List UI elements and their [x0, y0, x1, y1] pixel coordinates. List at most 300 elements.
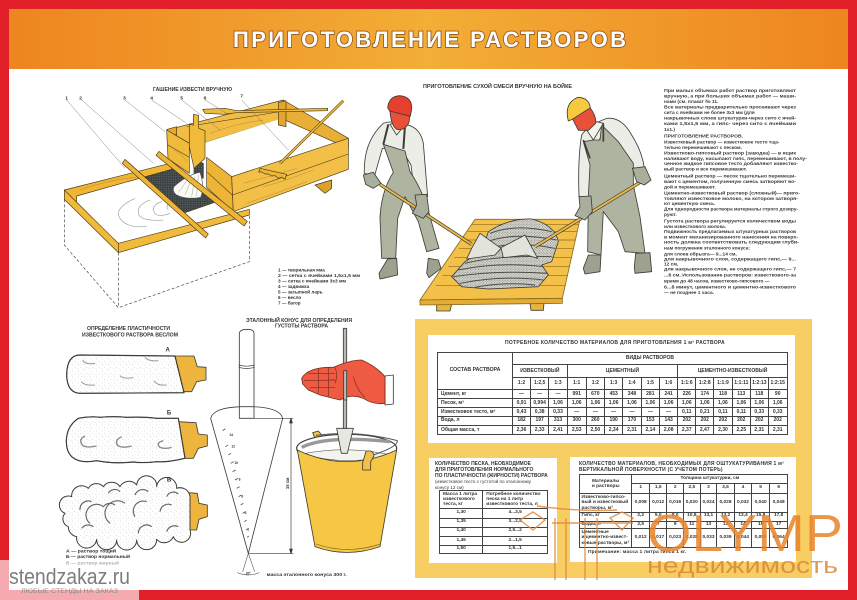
dimension line: [248, 418, 293, 553]
table: materials per 1 m3: 170: [628, 417, 636, 423]
upper box inner floor: [205, 118, 317, 175]
table: materials per 1 m3: Цемент, кг: [441, 391, 466, 397]
table: materials per 1 m3: ВИДЫ РАСТВОРОВ: [626, 355, 674, 361]
pit interior: [77, 169, 247, 239]
heading: sand table: конусу 12 см): [435, 485, 464, 490]
table: materials per 1 m3: 991: [573, 391, 581, 397]
table: materials per 1 m3: Известковое тесто, м³: [441, 409, 495, 415]
table: materials per 1 m3: 2,31: [627, 427, 637, 433]
legend: lime slaking: 4 — задвижка: [278, 284, 310, 289]
table: plaster materials per 1 m2: 6: [777, 485, 780, 490]
collar: [587, 122, 603, 140]
table: sand per lime paste: 2...1,5: [508, 538, 522, 543]
table: materials per 1 m3: 2,31: [773, 427, 783, 433]
body text: вый раствор и все перемешивают.: [664, 166, 747, 172]
logo lines: [520, 506, 633, 580]
table: plaster materials per 1 m2: 13: [706, 522, 711, 527]
mesh: [143, 168, 217, 213]
body text: вают с цементом, полученную смесь затворяют во-: [664, 180, 796, 185]
table: plaster materials per 1 m2: 3: [707, 485, 710, 490]
table: materials per 1 m3: 226: [683, 391, 691, 397]
standard cone: 6: [241, 494, 243, 498]
paddle A: А: [166, 348, 171, 354]
table: materials per 1 m3: —: [648, 409, 653, 415]
table: plaster materials per 1 m2: 13,4: [738, 513, 748, 518]
pit back plank: [64, 163, 172, 202]
table: materials per 1 m3: 313: [554, 417, 562, 423]
table: materials per 1 m3: Общая масса, т: [441, 427, 479, 433]
table: plaster materials per 1 m2: 0,028: [719, 500, 732, 505]
body text: руют.: [664, 213, 677, 218]
table: materials per 1 m3: СОСТАВ РАСТВОРА: [450, 367, 500, 373]
heading: plasticity: ИЗВЕСТКОВОГО РАСТВОРА ВЕСЛОМ: [82, 332, 178, 338]
paddle B: Б: [167, 410, 172, 416]
table: plaster materials per 1 m2: 9: [674, 522, 676, 527]
legend: lime slaking: 5 — засыпной ларь: [278, 288, 323, 294]
legend: paddles: А — раствор тощий: [66, 548, 116, 554]
table: materials per 1 m3: 118: [719, 391, 727, 397]
table: materials per 1 m3: 0,11: [682, 409, 692, 415]
bucket body: [297, 450, 397, 552]
table: materials per 1 m3: 453: [609, 391, 618, 397]
table: materials per 1 m3: 1:1:11: [734, 380, 748, 386]
table: materials per 1 m3: 153: [646, 417, 654, 423]
standard cone: 2: [247, 528, 249, 532]
table: sand per lime paste: Масса 1 литра: [443, 492, 477, 497]
paddle V: В: [167, 477, 172, 483]
table: materials per 1 m3: 1,06: [773, 400, 783, 406]
support block: [315, 180, 332, 193]
table: materials per 1 m3: 348: [628, 391, 636, 397]
heading: sand table: ДЛЯ ПРИГОТОВЛЕНИЯ НОРМАЛЬНОГО: [435, 467, 533, 473]
table: materials per 1 m3: —: [574, 409, 579, 415]
table: plaster materials per 1 m2: 11: [689, 522, 694, 527]
table: materials per 1 m3: 2,30: [718, 427, 728, 433]
table: materials per 1 m3: 143: [664, 417, 673, 423]
body text: ность должна соответствовать следующим глуби-: [664, 238, 799, 246]
body text: сита с ячейками не более 3х3 мм (для: [664, 109, 755, 116]
title: ПРИГОТОВЛЕНИЕ РАСТВОРОВ: [233, 27, 626, 52]
body text: ...8 см. Использование растворов: известкового-за: [664, 272, 796, 278]
table: materials per 1 m3: 2,53: [572, 427, 582, 433]
table: materials per 1 m3: 1:5: [647, 380, 654, 386]
table: materials per 1 m3: 1,06: [572, 400, 582, 406]
table: plaster materials per 1 m2: 3,5: [722, 485, 729, 490]
table: materials per 1 m3: 0,33: [754, 409, 764, 415]
body text: Подвижность предлагаемых штукатурных растворов: [664, 229, 796, 235]
table: materials per 1 m3: ЦЕМЕНТНО-ИЗВЕСТКОВЫЙ: [698, 368, 767, 374]
legend: paddles: В — раствор жирный: [66, 560, 119, 566]
table: plaster materials per 1 m2: 10,9: [687, 513, 696, 518]
body text: дой и перемешивают.: [664, 184, 716, 190]
body text: ют цементную смесь.: [664, 202, 715, 207]
table: materials per 1 m3: 0,11: [737, 409, 746, 415]
table: plaster materials per 1 m2: Цементные: [582, 530, 609, 535]
straps: [383, 124, 405, 149]
table: materials per 1 m3: —: [611, 409, 616, 415]
body text: нам погружения эталонного конуса:: [664, 246, 750, 252]
callout numbers: 1: [65, 95, 68, 101]
table: materials per 1 m3: ЦЕМЕНТНЫЙ: [606, 368, 639, 374]
table: materials per 1 m3: 1:3: [610, 380, 617, 386]
callout numbers: 5: [180, 95, 183, 101]
table: materials per 1 m3: 2,50: [590, 427, 600, 433]
table: plaster materials per 1 m2: и растворы: [592, 484, 620, 489]
body text: 12 см,: [664, 262, 679, 268]
table: materials per 1 m3: 2,36: [517, 427, 526, 433]
standard cone: 4: [245, 511, 247, 515]
table: materials per 1 m3: 1,06: [609, 400, 618, 406]
table: materials per 1 m3: 2,47: [700, 427, 710, 433]
table: materials per 1 m3: 1:1:6: [681, 380, 693, 386]
legend: lime slaking: 7 — багор: [278, 300, 301, 306]
table: plaster materials per 1 m2: 4: [742, 485, 744, 490]
table: plaster materials per 1 m2: 0,044: [737, 535, 749, 540]
card: sand table: [429, 458, 557, 563]
rod: [343, 328, 347, 428]
table: materials per 1 m3: 113: [737, 391, 745, 397]
gloves: [363, 172, 429, 218]
head: [572, 108, 596, 130]
table: materials per 1 m3: 2,41: [553, 427, 563, 433]
paddle V: [59, 476, 207, 550]
heading: plaster table: КОЛИЧЕСТВО МАТЕРИАЛОВ, НЕОБХОДИМЫХ ДЛЯ ОШТУКАТУРИВАНИЯ 1 м²: [579, 461, 784, 467]
apex angle: [237, 553, 259, 575]
table: plaster materials per 1 m2: 13,2: [721, 513, 730, 518]
body text: Густота раствора регулируется количеством воды: [664, 218, 796, 224]
table: plaster materials per 1 m2: 0,020: [686, 500, 698, 505]
body text: товляют известковое молоко, на котором затворя-: [664, 197, 798, 202]
table: plaster materials per 1 m2: 14: [740, 522, 746, 527]
overalls: [583, 125, 645, 255]
body text: наливают воду, насыпают гипс, перемешивают, в полу-: [664, 157, 807, 162]
table: materials per 1 m3: 670: [591, 391, 600, 397]
body text: вручную, а при больших объемах работ — маши-: [664, 92, 796, 100]
table: materials per 1 m3: 1,06: [682, 400, 692, 406]
legend: paddles: [66, 548, 130, 566]
table: materials per 1 m3: 202: [719, 417, 727, 423]
body text: тельно перемешивают с песком.: [664, 146, 742, 151]
table: plaster materials per 1 m2: 0,023: [669, 535, 681, 540]
standard cone: 8: [239, 478, 241, 482]
hand: [302, 360, 393, 405]
table: materials per 1 m3: 1:2: [518, 380, 525, 386]
table: materials per 1 m3: 260: [591, 417, 600, 423]
table: plaster materials per 1 m2: 2,5: [637, 522, 644, 527]
table: materials per 1 m3: —: [593, 409, 598, 415]
table: materials per 1 m3: 2,37: [682, 427, 692, 433]
gate: [189, 114, 205, 168]
heading: main table: ПОТРЕБНОЕ КОЛИЧЕСТВО МАТЕРИАЛОВ ДЛЯ ПРИГОТОВЛЕНИЯ 1 м³ РАСТВОРА: [505, 340, 725, 346]
body text: Известково-гипсовый раствор (заводка) — в ящик: [664, 150, 797, 156]
table: materials per 1 m3: —: [537, 391, 542, 397]
table: materials per 1 m3: 2,34: [609, 427, 618, 433]
table: materials per 1 m3: 0,11: [718, 409, 728, 415]
table: sand per lime paste: 3...2,5: [508, 519, 522, 524]
overalls: [380, 144, 439, 258]
red helmet: [388, 96, 412, 116]
body text: 1х1.): [664, 127, 675, 133]
upper box corner posts: [167, 101, 286, 135]
table: plaster materials per 1 m2: 0,064: [773, 535, 785, 540]
table: plaster materials per 1 m2: 0,012: [635, 535, 647, 540]
yellow helmet: [567, 97, 590, 121]
heading: sand table: КОЛИЧЕСТВО ПЕСКА, НЕОБХОДИМОЕ: [435, 461, 531, 467]
table: materials per 1 m3: 202: [737, 417, 745, 423]
table: plaster materials per 1 m2: 0,032: [737, 500, 749, 505]
card: plaster table: [570, 457, 796, 562]
callout numbers: 3: [123, 95, 126, 101]
standard cone: [211, 329, 293, 576]
straps: [583, 123, 603, 158]
bucket: [297, 328, 397, 552]
heading: standard cone: [246, 316, 352, 330]
wire handle: [316, 434, 397, 455]
table: plaster materials per 1 m2: 17,8: [774, 513, 783, 518]
table: materials per 1 m3: 1,06: [700, 400, 710, 406]
table: sand per lime paste: 4...3,5: [508, 510, 522, 515]
leader lines: [67, 100, 288, 168]
card: main table: [428, 335, 795, 443]
table: materials per 1 m3: 1,06: [736, 400, 746, 406]
table: sand per lime paste: 2,5...2: [508, 528, 522, 533]
table: materials per 1 m3: 1,06: [553, 400, 563, 406]
table: materials per 1 m3: 197: [535, 417, 544, 423]
shirt: [579, 118, 644, 197]
body text: для накрывочного слоя, не содержащего гипс,— 7: [664, 266, 796, 272]
standard cone: 10: [234, 461, 238, 465]
table: plaster materials per 1 m2: 0,039: [719, 535, 732, 540]
table: materials per 1 m3: 174: [701, 391, 709, 397]
paddle A: [67, 348, 206, 393]
lime swirl lines: [118, 198, 170, 227]
table: materials per 1 m3: 1:3: [554, 380, 562, 386]
table: materials per 1 m3: 2,14: [645, 427, 655, 433]
table: materials per 1 m3: 2,33: [535, 427, 545, 433]
table: plaster materials per 1 m2: 0,053: [755, 535, 767, 540]
illustration: workers mixing on board: [363, 96, 652, 311]
cone mass caption: масса эталонного конуса 300 г.: [267, 572, 347, 577]
mix pile: [452, 219, 558, 289]
upper box front wall: [232, 138, 348, 212]
board: [420, 219, 580, 300]
callout numbers: 4: [150, 95, 153, 101]
table: plaster materials per 1 m2: 8,0: [672, 513, 678, 518]
table: plaster materials per 1 m2: 5: [759, 485, 762, 490]
body text: для накрывочного слоя, содержащего гипс,— 9...: [664, 256, 796, 262]
table: plaster materials per 1 m2: 0,024: [702, 500, 714, 505]
legend: lime slaking: [278, 268, 361, 306]
standard cone: 12: [231, 444, 235, 448]
small cone: [337, 428, 353, 453]
table: materials per 1 m3: 0,38: [535, 409, 545, 415]
table: plaster materials per 1 m2: Толщина штукатурки, см: [680, 476, 739, 481]
body text: или известкового молока.: [664, 225, 726, 230]
sub wordmark: недвижимость: [647, 553, 838, 578]
table: plaster materials per 1 m2: 2: [674, 485, 676, 490]
cross bars: [122, 159, 208, 238]
sliding mesh upper: [194, 160, 203, 178]
table: sand per lime paste: песка на 1 литр: [486, 497, 523, 502]
head: [390, 111, 410, 130]
table: materials per 1 m3: 0,91: [517, 400, 526, 406]
upper box right wall: [283, 100, 348, 148]
boots: [379, 258, 441, 279]
rake: [280, 101, 343, 163]
table: materials per 1 m3: 0,33: [553, 409, 563, 415]
table: sand per lime paste: 1,30: [456, 510, 466, 515]
note: Примечание: масса 1 литра гипса 1 кг.: [588, 550, 686, 555]
table: plaster materials per 1 m2: 0,016: [669, 500, 681, 505]
table: plaster materials per 1 m2: 1: [639, 485, 642, 490]
heading: dry mix: ПРИГОТОВЛЕНИЕ СУХОЙ СМЕСИ ВРУЧНУЮ НА БОЙКЕ: [423, 82, 573, 90]
callout numbers: 2: [79, 95, 82, 101]
table: plaster materials per 1 m2: [579, 474, 788, 548]
table: materials per 1 m3: 1,06: [664, 400, 673, 406]
body text: время до 48 часов, известково-гипсового —: [664, 278, 770, 284]
table: materials per 1 m3: 182: [517, 417, 526, 423]
body text: — не позднее 1 часа.: [664, 290, 714, 296]
table: materials per 1 m3: 281: [646, 391, 654, 397]
table: sand per lime paste: 1,35: [456, 519, 466, 524]
boots: [583, 253, 652, 274]
shovel: [380, 184, 472, 244]
heading: standard cone: ГУСТОТЫ РАСТВОРА: [275, 324, 328, 330]
table: materials per 1 m3: 1,06: [645, 400, 655, 406]
table: plaster materials per 1 m2: 2,5: [688, 485, 695, 490]
table: materials per 1 m3: 2,25: [736, 427, 746, 433]
table: materials per 1 m3: 2,31: [754, 427, 764, 433]
table: materials per 1 m3: 0,994: [533, 400, 546, 406]
standard cone: 15 см: [285, 478, 290, 489]
legend: lime slaking: 2 — сетка с ячейками 1,5х1,5 мм: [278, 272, 361, 278]
table: materials per 1 m3: 1,06: [590, 400, 600, 406]
table: materials per 1 m3: 1:6: [665, 380, 672, 386]
table: plaster materials per 1 m2: 1,5: [655, 485, 662, 490]
table: materials per 1 m3: 1:2,5: [534, 380, 545, 386]
heading: sand table: ПО ПЛАСТИЧНОСТИ (ЖИРНОСТИ) РАСТВОРА: [435, 473, 548, 479]
pit front planks: [64, 190, 249, 253]
paddle B: [66, 410, 207, 463]
lug: [363, 451, 374, 470]
lime pile: [173, 172, 203, 198]
table: materials per 1 m3: [437, 352, 788, 435]
table: materials per 1 m3: 202: [755, 417, 763, 423]
table: materials per 1 m3: —: [666, 409, 671, 415]
table: materials per 1 m3: 0,33: [773, 409, 783, 415]
table: materials per 1 m3: 1:2:15: [770, 380, 785, 386]
table: materials per 1 m3: 1,06: [718, 400, 728, 406]
table: materials per 1 m3: 1,06: [627, 400, 637, 406]
plank seams: [168, 112, 348, 195]
table: plaster materials per 1 m2: 0,028: [686, 535, 698, 540]
table: materials per 1 m3: ИЗВЕСТКОВЫЙ: [520, 368, 559, 374]
header band: [9, 9, 848, 69]
table: materials per 1 m3: 202: [774, 417, 782, 423]
right worker: [501, 97, 652, 274]
body text: [664, 87, 807, 296]
heading: sand table: (известковое тесто с густотой по эталонному: [435, 479, 531, 484]
table: sand per lime paste: теста, кг: [443, 502, 463, 507]
table: plaster materials per 1 m2: 7: [657, 522, 660, 527]
table: plaster materials per 1 m2: 13,1: [704, 513, 713, 518]
table: materials per 1 m3: Песок, м³: [441, 400, 464, 406]
table: materials per 1 m3: —: [629, 409, 634, 415]
standard cone: 30°: [246, 572, 252, 576]
table: materials per 1 m3: 1:2:13: [752, 380, 767, 386]
table: sand per lime paste: известкового: [443, 497, 475, 502]
table: plaster materials per 1 m2: растворы, м³: [582, 506, 613, 511]
table: materials per 1 m3: 2,08: [664, 427, 673, 433]
table: materials per 1 m3: 1:4: [628, 380, 636, 386]
table: materials per 1 m3: 300: [573, 417, 581, 423]
table: materials per 1 m3: Вода, л: [441, 417, 460, 423]
heading: standard cone: ЭТАЛОННЫЙ КОНУС ДЛЯ ОПРЕДЕЛЕНИЯ: [246, 316, 352, 324]
panel: yellow tables background: [415, 319, 812, 578]
table: plaster materials per 1 m2: 5,0: [655, 513, 662, 518]
table: plaster materials per 1 m2: Гипс, кг: [582, 513, 600, 518]
table: plaster materials per 1 m2: ковые растворы, м³: [582, 541, 629, 546]
shirt: [364, 122, 428, 197]
table: plaster materials per 1 m2: 0,012: [652, 500, 664, 505]
upper box back wall: [167, 100, 283, 143]
illustrations: paddles, cone, bucket: [59, 328, 397, 577]
table: plaster materials per 1 m2: Известково-гипсо-: [582, 495, 626, 500]
body text: Все материалы предварительно просеивают через: [664, 104, 797, 110]
pit outline: [64, 199, 249, 308]
body text: Цементно-известковый раствор (сложный)— приго-: [664, 190, 800, 196]
illustration: lime slaking box: [64, 93, 348, 308]
table: materials per 1 m3: 1:1: [573, 380, 580, 386]
body text: ками 1,5х1,5 мм, а гипс- через сито с ячейками: [664, 120, 796, 127]
table: plaster materials per 1 m2: 0,033: [702, 535, 714, 540]
table: plaster materials per 1 m2: 2,2: [637, 513, 644, 518]
table: sand per lime paste: 1,45: [456, 538, 466, 543]
shovel: [535, 182, 640, 247]
bucket interior: [297, 434, 397, 462]
gloves: [575, 167, 651, 220]
body text: Цементный раствор — песок тщательно перемеши-: [664, 172, 796, 180]
body text: 6...8 минут, цементного и цементно-известкового: [664, 284, 796, 290]
heading: plasticity: [82, 326, 178, 338]
table: materials per 1 m3: 90: [775, 391, 780, 397]
table: plaster materials per 1 m2: 13: [723, 522, 728, 527]
legend: lime slaking: 6 — весло: [278, 295, 301, 300]
collar: [390, 122, 405, 135]
wood grain: [70, 120, 313, 238]
legend: lime slaking: 1 — творильная яма: [278, 268, 325, 272]
table: plaster materials per 1 m2: 0,008: [635, 500, 647, 505]
legend: lime slaking: 3 — сетка с ячейками 3х3 мм: [278, 278, 347, 284]
upper box left wall: [167, 130, 189, 173]
table: materials per 1 m3: 1:2:8: [699, 380, 711, 386]
body text: в момент механизированного нанесения на поверх-: [664, 236, 798, 240]
body text: Известковый раствор — известковое тесто тща-: [664, 138, 780, 146]
left worker: [363, 96, 501, 279]
watermark: stendzakaz: [0, 560, 139, 600]
callout numbers: [65, 93, 243, 101]
body text: Для однородности раствора материалы строго дозиру-: [664, 206, 798, 212]
board feet: [437, 303, 544, 311]
table: sand per lime paste: известкового теста, л: [486, 502, 538, 507]
table: sand per lime paste: 1,50: [456, 546, 466, 551]
table: materials per 1 m3: 1,06: [754, 400, 764, 406]
table: materials per 1 m3: —: [519, 391, 524, 397]
heading: sand table: [435, 461, 548, 490]
table: materials per 1 m3: 190: [609, 417, 618, 423]
body text: для слоев обрызга— 9...14 см,: [664, 250, 737, 258]
body text: ченное жидкое гипсовое тесто добавляют известко-: [664, 160, 798, 167]
